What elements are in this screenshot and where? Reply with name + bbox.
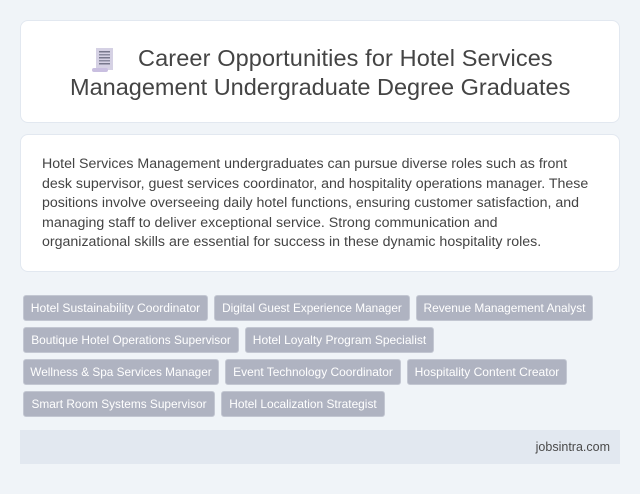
description text [42,156,588,250]
description text: desk supervisor, guest services coordinator, and hospitality operations manager. These [42,176,588,192]
footer bar [20,430,620,464]
tag: Hotel Localization Strategist: Hotel Localization Strategist [229,397,377,411]
tag: Digital Guest Experience Manager [214,295,410,321]
tag: Hospitality Content Creator [407,359,567,385]
icon: hotel receipt document [92,48,113,72]
tag: Event Technology Coordinator [225,359,401,385]
title: Management Undergraduate Degree Graduates [70,74,570,100]
title: Career Opportunities for Hotel Services [138,45,553,71]
tag: Wellness & Spa Services Manager [23,359,219,385]
panel: career tags [23,295,593,417]
panel: description card [20,134,620,272]
tag: Hotel Loyalty Program Specialist [245,327,434,353]
description text: positions involve overseeing daily hotel functions, ensuring customer satisfaction, and [42,195,579,211]
tag: Revenue Management Analyst [416,295,593,321]
tag: Smart Room Systems Supervisor [23,391,215,417]
title [70,45,570,100]
footer source text: jobsintra.com [536,440,610,454]
tag: Hotel Sustainability Coordinator: Hotel Sustainability Coordinator [31,301,200,315]
tag: Wellness & Spa Services Manager: Wellness & Spa Services Manager [30,365,212,379]
panel: title card [20,20,620,123]
tag: Boutique Hotel Operations Supervisor [23,327,239,353]
tag: Digital Guest Experience Manager: Digital Guest Experience Manager [222,301,402,315]
description text: Hotel Services Management undergraduates can pursue diverse roles such as front [42,156,567,172]
description text: organizational skills are essential for success in these dynamic hospitality roles. [42,234,541,250]
tag: Revenue Management Analyst: Revenue Management Analyst [424,301,585,315]
tag: Event Technology Coordinator: Event Technology Coordinator [233,365,393,379]
tag: Hotel Loyalty Program Specialist: Hotel Loyalty Program Specialist [253,333,426,347]
tag: Boutique Hotel Operations Supervisor: Boutique Hotel Operations Supervisor [31,333,231,347]
tag: Hotel Localization Strategist [221,391,385,417]
tag: Smart Room Systems Supervisor: Smart Room Systems Supervisor [31,397,207,411]
description text: managing staff to deliver exceptional service. Strong communication and [42,214,498,230]
tag: Hotel Sustainability Coordinator [23,295,208,321]
tag: Hospitality Content Creator: Hospitality Content Creator [415,365,559,379]
